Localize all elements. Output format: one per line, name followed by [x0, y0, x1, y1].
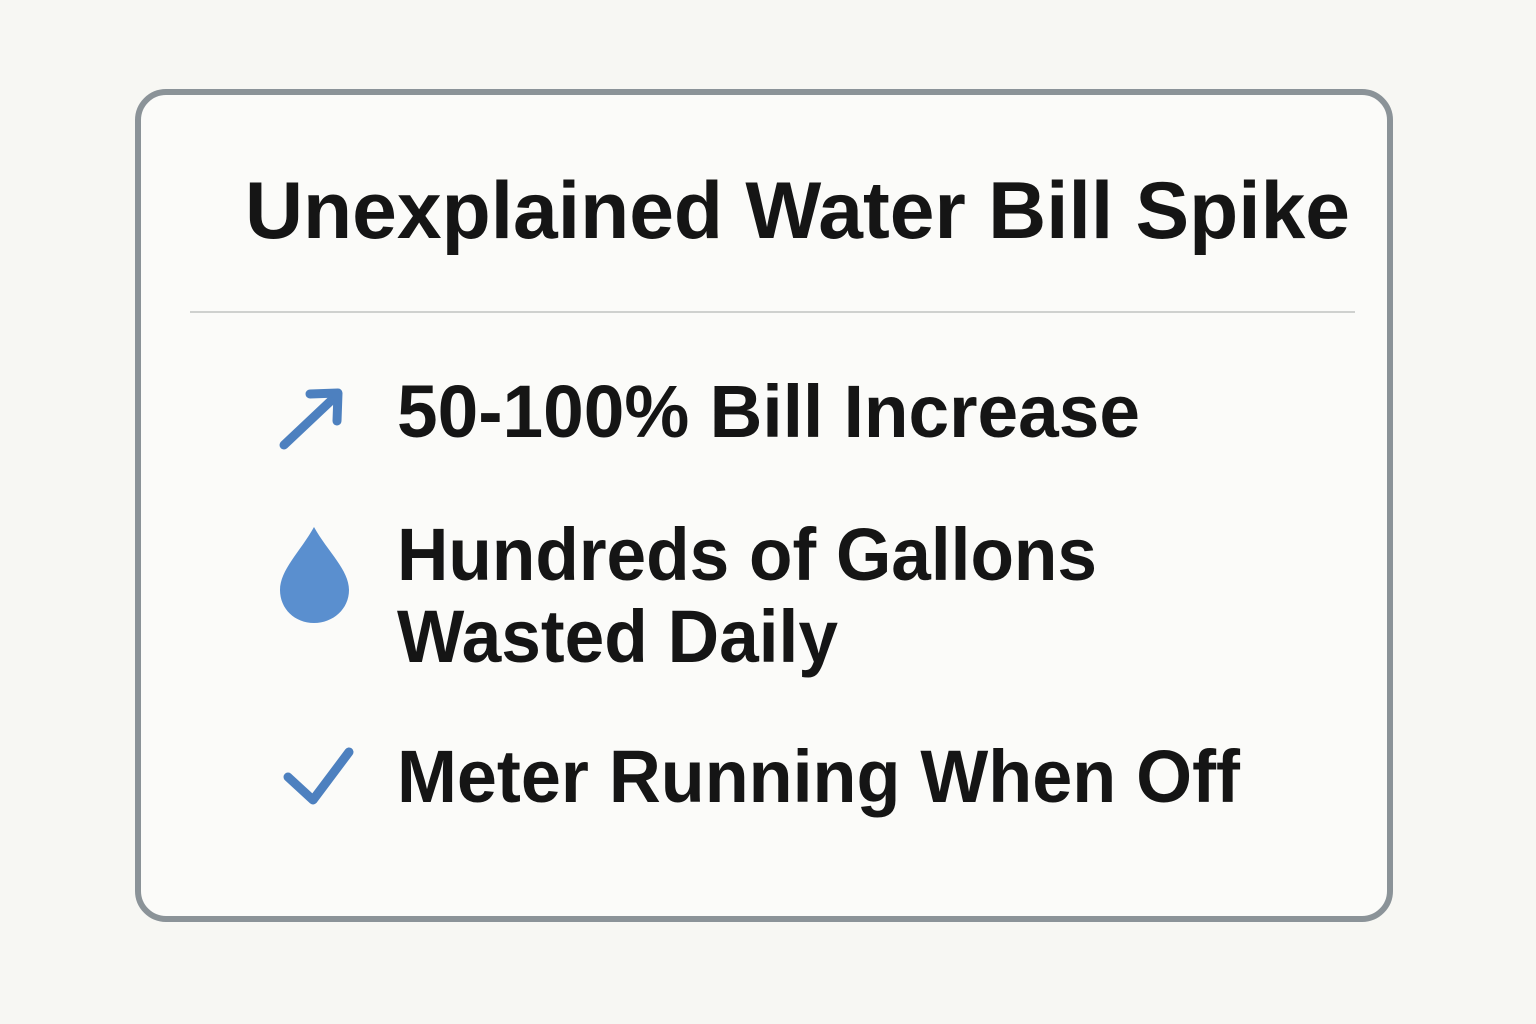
text: gallons wasted: Wasted Daily	[397, 595, 838, 678]
icon: arrow up-right	[284, 393, 338, 445]
text: gallons wasted: Hundreds of Gallons	[397, 513, 1097, 596]
icon: checkmark	[288, 752, 349, 800]
text: gallons wasted	[397, 513, 1097, 678]
icon: water drop	[280, 527, 349, 623]
text: bill increase: 50-100% Bill Increase	[397, 370, 1140, 453]
panel: card	[138, 92, 1390, 919]
text: meter running: Meter Running When Off	[397, 735, 1240, 818]
title: Unexplained Water Bill Spike	[245, 166, 1350, 256]
